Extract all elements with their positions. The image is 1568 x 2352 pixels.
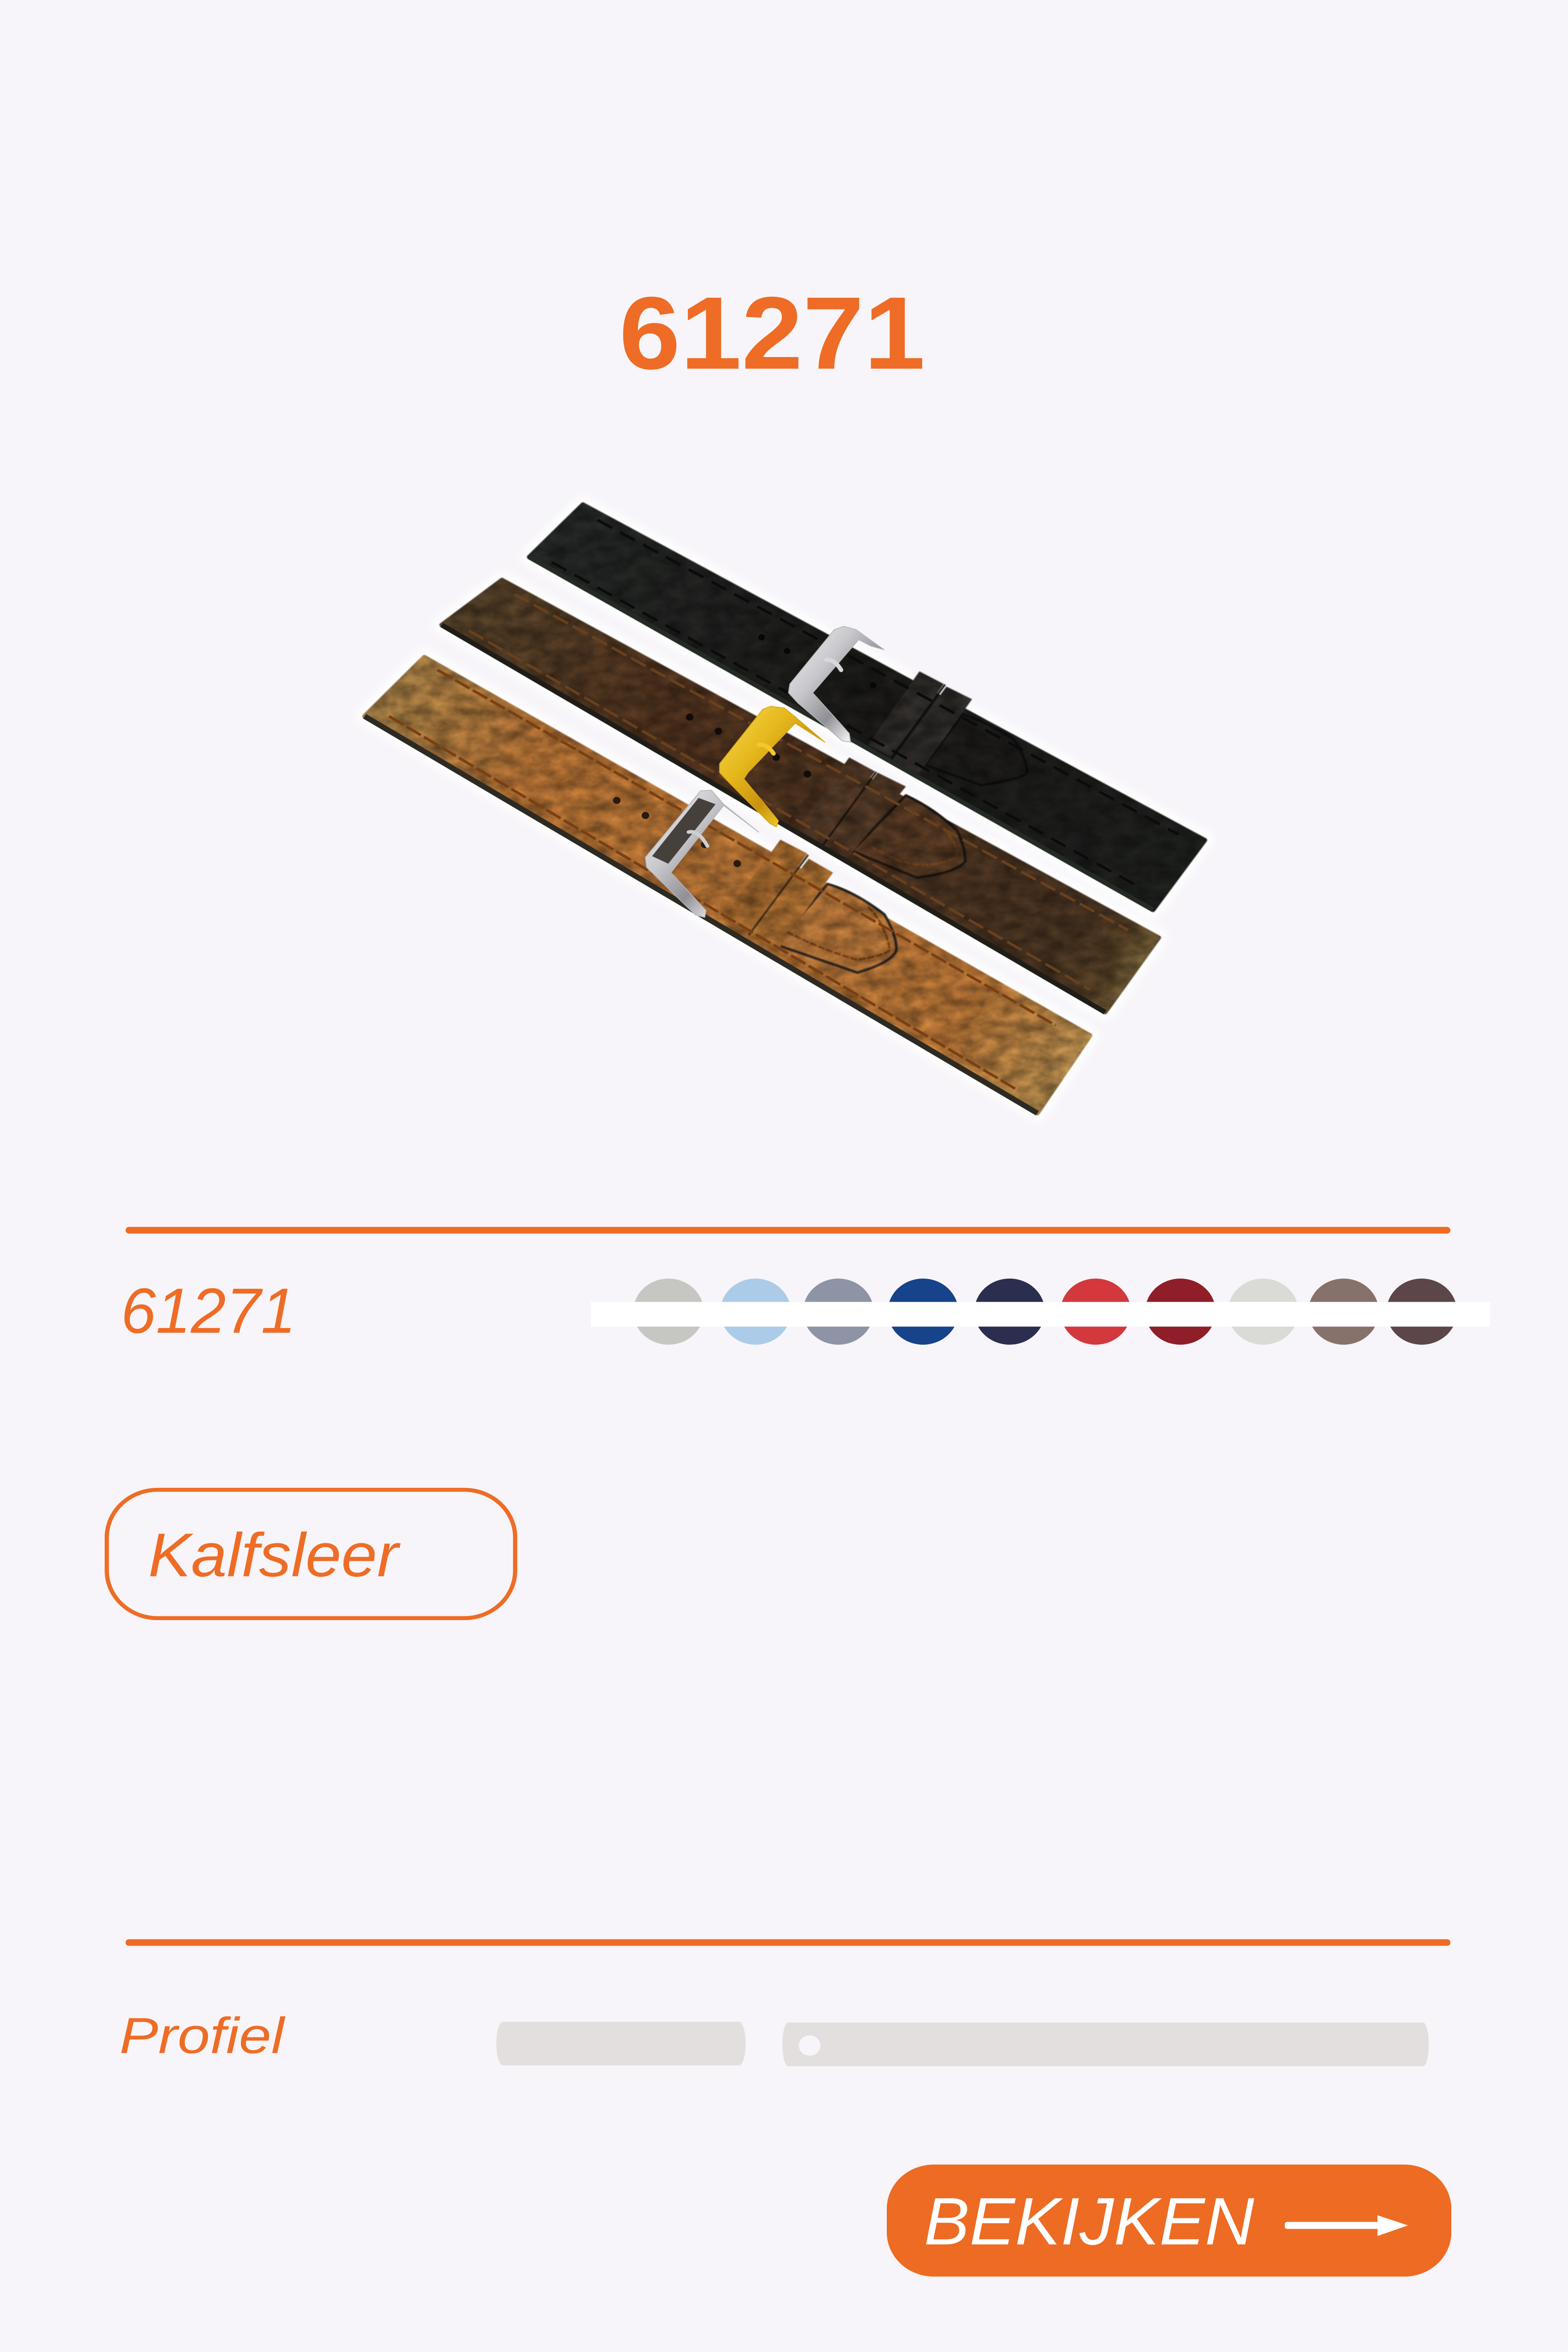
model number label: 61271 [121,1275,296,1346]
divider line: top [126,1227,1450,1233]
button: BEKIJKEN: BEKIJKEN [924,2184,1254,2259]
silver buckle with dark face [645,790,759,917]
silver buckle [788,626,884,742]
profile diagram: short strap piece [496,2022,746,2066]
tan strap [365,657,1090,1113]
gold buckle [720,706,825,827]
profile diagram: long strap piece [782,2023,1429,2066]
button: BEKIJKEN [887,2165,1451,2277]
material tag: Kalfsleer: Kalfsleer [148,1520,401,1589]
profile label: Profiel [119,2008,286,2064]
dark brown strap [442,580,1159,1012]
divider line: bottom [126,1939,1450,1946]
colour swatches [591,1279,1490,1345]
icon: arrow [1285,2215,1408,2236]
photo: three leather watch straps [365,505,1205,1113]
white bar across swatches [591,1302,1490,1327]
black strap [529,505,1205,910]
title: 61271 [619,275,925,391]
material tag: Kalfsleer [107,1490,515,1618]
white halo behind straps [365,505,1205,1113]
